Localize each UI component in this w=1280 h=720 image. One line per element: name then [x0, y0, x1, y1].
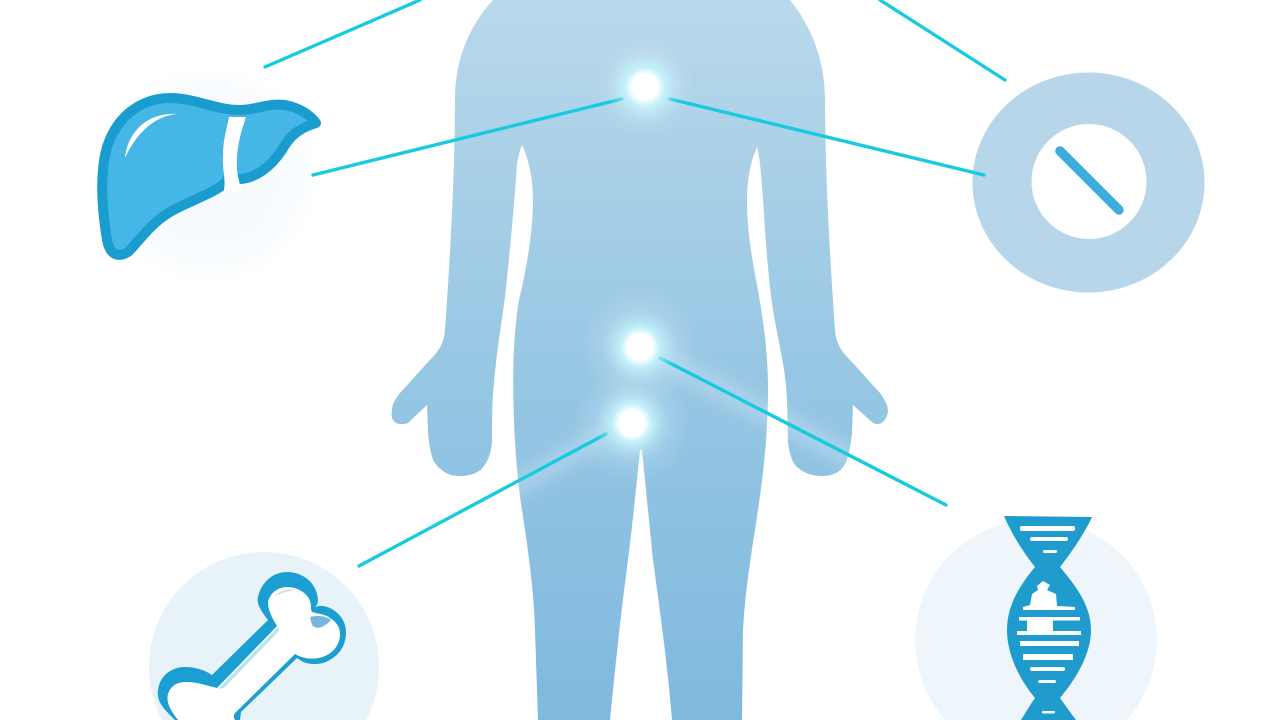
line: to bone	[359, 434, 606, 566]
line: top left	[265, 0, 420, 67]
DNA backdrop	[915, 519, 1157, 720]
glow point: upper torso	[607, 49, 683, 125]
line: to DNA	[660, 358, 946, 505]
line: top right	[880, 0, 1005, 80]
bone shaft highlight	[218, 627, 279, 689]
bone knob shading	[275, 589, 295, 596]
liver highlight	[125, 114, 177, 158]
liver backdrop	[95, 60, 325, 290]
human body silhouette	[391, 0, 888, 720]
liver shape	[102, 98, 316, 255]
bone backdrop	[149, 552, 379, 720]
glow point: pelvis	[594, 385, 670, 461]
bone shading	[310, 616, 331, 628]
icon: DNA helix	[915, 516, 1157, 720]
glow point: abdomen	[602, 309, 678, 385]
DNA rungs	[1017, 526, 1081, 714]
line: to pill	[670, 99, 984, 175]
DNA helix body	[1004, 516, 1092, 720]
icon: liver	[95, 60, 325, 290]
glow: pelvis halo	[572, 364, 692, 484]
glow: abdomen halo	[579, 286, 699, 406]
liver lobe gap	[223, 117, 246, 192]
glow: upper torso halo	[595, 37, 695, 137]
pill ring	[972, 72, 1204, 292]
bone interior	[167, 587, 340, 720]
pill bar	[1060, 151, 1119, 210]
bone outline	[158, 572, 346, 720]
icon: bone	[149, 552, 379, 720]
icon: pill circle	[972, 72, 1204, 292]
pill inner disc	[1032, 124, 1146, 239]
glow: soft light along lower connector lines	[420, 358, 860, 540]
connector lines	[265, 0, 1005, 566]
line: to liver	[313, 99, 622, 175]
